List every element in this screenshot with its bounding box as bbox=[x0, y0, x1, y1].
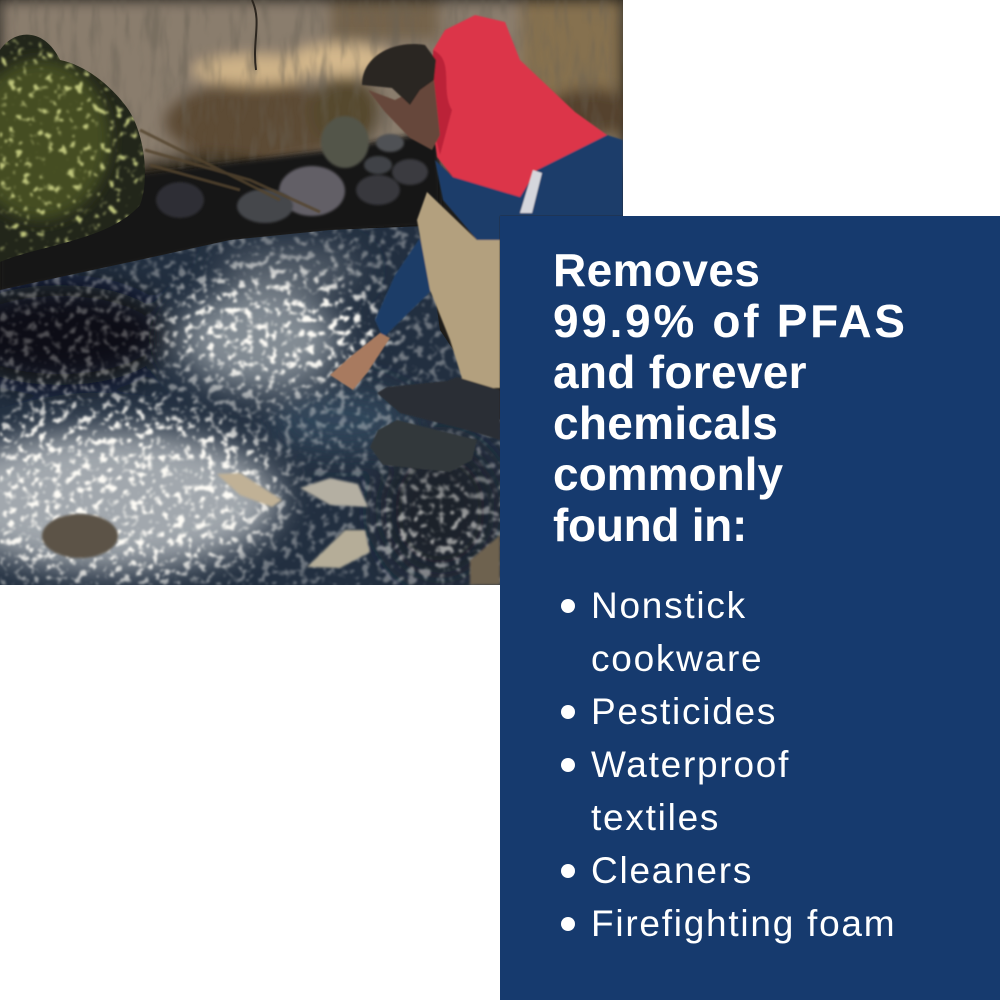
bullet list: cookware bbox=[591, 638, 763, 679]
heading bbox=[553, 244, 908, 551]
bullet list: textiles bbox=[591, 797, 720, 838]
bullet list: Cleaners bbox=[591, 850, 753, 891]
navy jacket hem bbox=[435, 135, 623, 240]
shrub bbox=[0, 34, 145, 262]
hood shadow bbox=[433, 50, 452, 155]
trousers bbox=[417, 192, 500, 388]
face bbox=[368, 80, 440, 150]
bullet list: Pesticides bbox=[591, 691, 777, 732]
heading: found in: bbox=[553, 499, 747, 551]
man bbox=[330, 15, 623, 472]
boot bbox=[377, 377, 500, 440]
heading: commonly bbox=[553, 448, 783, 500]
photo: man reaching into a sunlit stream bbox=[0, 0, 623, 585]
bullet list: Waterproof bbox=[591, 744, 790, 785]
red jacket bbox=[433, 15, 607, 197]
water bbox=[0, 226, 500, 585]
panel: PFAS information bbox=[500, 216, 1000, 1000]
heading: Removes bbox=[553, 244, 760, 296]
dry grass background bbox=[0, 0, 635, 186]
bullet list: Firefighting foam bbox=[591, 903, 896, 944]
hair bbox=[362, 44, 436, 105]
heading: chemicals bbox=[553, 397, 778, 449]
stream rocks bbox=[42, 473, 500, 585]
white stripe bbox=[520, 170, 542, 213]
hand and forearm bbox=[330, 333, 390, 390]
heading: and forever bbox=[553, 346, 807, 398]
heading: 99.9% of PFAS bbox=[553, 295, 908, 347]
stone bank bbox=[0, 116, 440, 292]
bullet list: Nonstick bbox=[591, 585, 747, 626]
bullet list bbox=[561, 585, 896, 944]
sleeve bbox=[375, 238, 432, 338]
foot rock bbox=[370, 420, 477, 472]
